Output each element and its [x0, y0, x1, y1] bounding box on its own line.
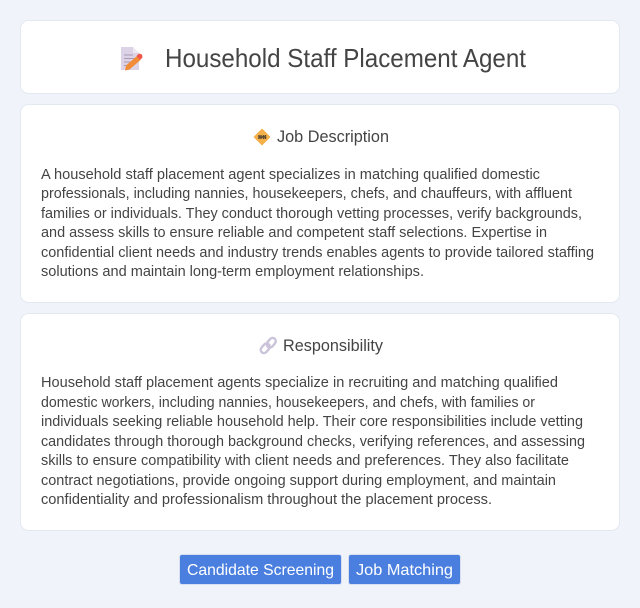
text block: job description body: [41, 167, 594, 280]
panel: title: [20, 20, 620, 94]
text block: responsibility body: individuals seeking reliable household help. Their core responsibilities include vetting: [41, 414, 583, 430]
text block: responsibility body: [41, 375, 585, 508]
text block: responsibility body: Household staff placement agents specialize in recruiting and matching qualified: [41, 375, 558, 391]
tag button: job matching: [348, 554, 460, 584]
text block: job description body: A household staff placement agent specializes in matching qualified domestic: [41, 167, 541, 183]
panel: job description: [20, 104, 620, 302]
text block: responsibility body: skills to ensure compatibility with client needs and preferences. They also facilitate: [41, 453, 569, 469]
text block: responsibility body: confidentiality and professionalism throughout the placement process.: [41, 492, 492, 508]
tag button: job matching: Job Matching: [356, 562, 453, 579]
text block: job description body: confidential client needs and industry trends enables agents to provide tailored staffing: [41, 245, 594, 261]
icon: document with pencil: [121, 47, 142, 70]
text block: job description body: solutions and maintain long-term employment relationships.: [41, 264, 424, 280]
tag button: candidate screening: [180, 554, 342, 584]
text block: job description body: professionals, including nannies, housekeepers, chefs, and chauffeurs, with affluent: [41, 186, 572, 202]
text block: job description body: families or individuals. They conduct thorough vetting processes, verify backgrounds,: [41, 206, 582, 222]
tag button: candidate screening: Candidate Screening: [187, 562, 334, 579]
text block: responsibility body: domestic workers, including nannies, housekeepers, and chefs, with families or: [41, 395, 535, 411]
heading: title text: Household Staff Placement Agent: [165, 43, 527, 73]
panel: responsibility: [20, 314, 620, 530]
heading: job description: Job Description: [277, 128, 389, 146]
text block: job description body: and assess skills to ensure reliable and competent staff selections. Expertise in: [41, 225, 547, 241]
text block: responsibility body: candidates through thorough background checks, verifying references, and assessing: [41, 434, 585, 450]
heading: responsibility: Responsibility: [283, 337, 384, 355]
text block: responsibility body: contract negotiations, provide ongoing support during employment, and maintain: [41, 473, 556, 489]
icon: yellow diamond sign: [254, 130, 270, 144]
icon: chain link: [259, 337, 277, 354]
